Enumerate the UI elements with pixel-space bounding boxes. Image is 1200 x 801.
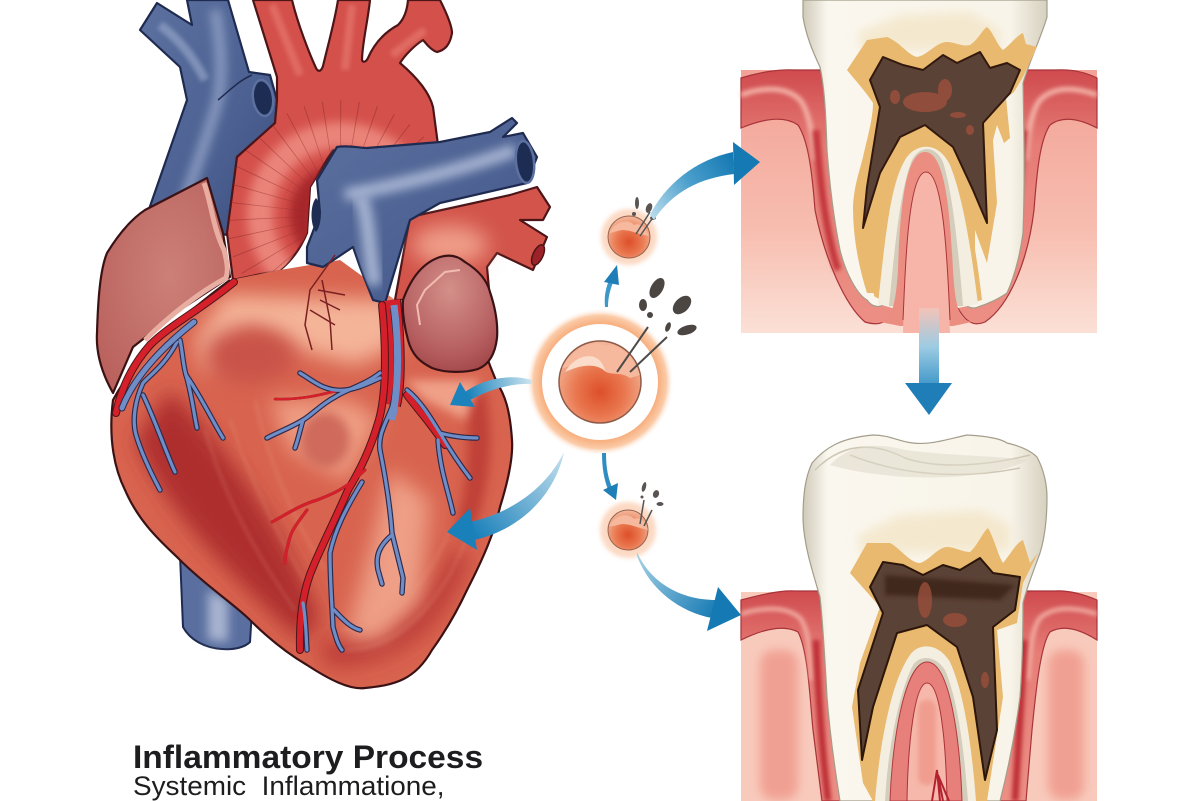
side vessel opening	[312, 198, 321, 232]
arrow: centre to heart lower	[447, 452, 564, 550]
tissue texture	[760, 650, 1084, 800]
upper small cell	[601, 197, 657, 265]
caption	[133, 739, 483, 801]
ventricle body	[111, 260, 512, 688]
pulmonary artery trunk	[307, 118, 537, 303]
lower small cell	[600, 482, 664, 558]
vessel opening	[514, 140, 536, 184]
coronary arteries and veins	[116, 282, 477, 650]
occlusal surface	[815, 447, 1030, 474]
arrow: centre to heart upper	[450, 377, 532, 407]
left atrium lobe	[97, 178, 230, 393]
gum block	[741, 70, 1097, 333]
decay brown mass	[863, 52, 1020, 228]
debris blobs	[639, 275, 698, 337]
right pulmonary branch	[395, 187, 550, 300]
decay mottling	[890, 79, 974, 135]
arrow: lower cell to bottom tooth	[637, 552, 741, 631]
pulp-side gum arch	[890, 662, 962, 801]
root dentin ring	[872, 635, 983, 801]
tan stain layer	[847, 27, 1037, 300]
arrow: centre to lower cell	[602, 453, 618, 500]
pulp-side gum arch	[880, 152, 972, 326]
central inflammation cell	[526, 275, 698, 456]
heart illustration	[97, 0, 550, 688]
top tooth with gum	[741, 0, 1097, 333]
tooth crown and roots	[803, 0, 1047, 308]
gum band	[741, 591, 1097, 801]
tooth crown and roots	[803, 435, 1047, 801]
tan stain layer	[850, 528, 1038, 801]
down arrow between teeth	[905, 308, 952, 415]
caption heading: Inflammatory Process	[133, 739, 483, 775]
arrow: centre to upper cell	[604, 265, 619, 307]
root vessels	[932, 770, 949, 801]
bottom tooth with gum	[741, 435, 1097, 801]
decay mottling	[918, 582, 989, 688]
vessel opening	[529, 243, 547, 267]
gum band	[741, 70, 1097, 324]
caption subheading: Systemic Inflammatione,	[133, 771, 445, 801]
decay brown mass	[858, 558, 1020, 780]
debris strands	[617, 327, 667, 372]
vessel opening	[251, 79, 275, 117]
aorta and arch branches	[227, 0, 452, 295]
root dentin ring	[874, 139, 982, 306]
right auricle	[403, 256, 497, 372]
arrow: small cell to top tooth	[650, 142, 760, 220]
superior vena cava	[140, 0, 277, 235]
stained enamel tint	[858, 12, 1000, 50]
inferior vena cava	[180, 555, 252, 649]
stained enamel tint	[858, 510, 1010, 555]
gum block	[741, 592, 1097, 801]
small vessels under trunk	[305, 255, 345, 350]
